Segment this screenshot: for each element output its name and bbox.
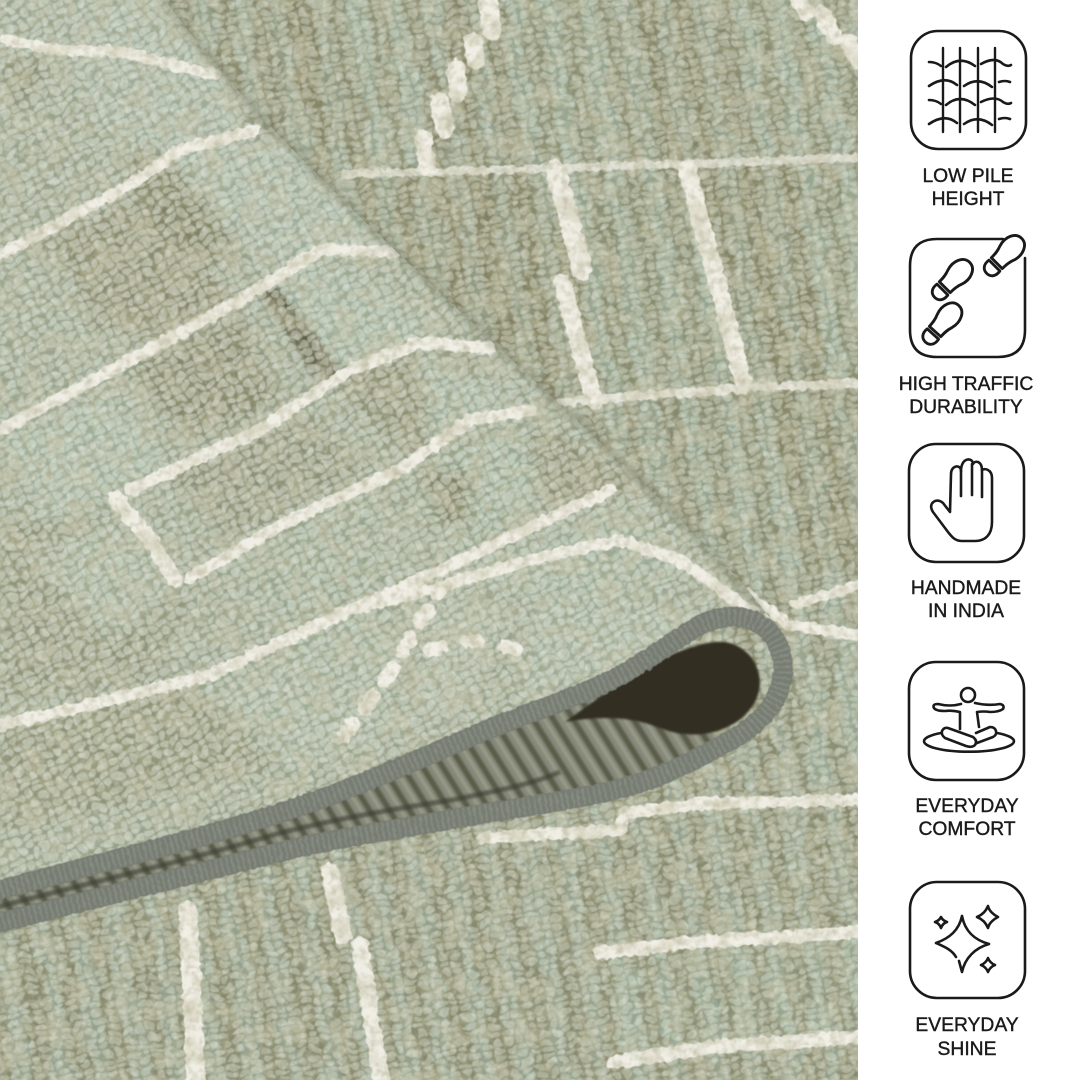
label: everyday comfort: COMFORT — [918, 819, 1016, 840]
label: everyday shine: SHINE — [938, 1039, 997, 1060]
fold shadow — [165, 0, 772, 628]
icon panel: everyday comfort — [909, 662, 1024, 840]
label: high traffic durability — [899, 374, 1033, 418]
icon panel: handmade in india — [909, 444, 1024, 622]
icon: woven pile — [911, 31, 1026, 149]
label: everyday shine — [915, 1015, 1019, 1060]
label: everyday shine: EVERYDAY — [915, 1015, 1019, 1036]
label: high traffic durability: HIGH TRAFFIC — [899, 374, 1033, 395]
label: everyday comfort: EVERYDAY — [915, 796, 1019, 817]
hem: continuous binding — [0, 617, 783, 925]
label: handmade in india: HANDMADE — [911, 578, 1021, 599]
underside ribs — [0, 691, 719, 912]
white rug lines fold — [0, 40, 770, 735]
inner dark opening — [565, 642, 760, 734]
label: high traffic durability: DURABILITY — [909, 397, 1023, 418]
label: low pile height: LOW PILE — [922, 166, 1014, 187]
icon: footprints — [910, 231, 1029, 357]
hem shadow — [0, 772, 560, 909]
rug folded layer — [0, 0, 800, 900]
rug underside and hem — [0, 617, 783, 925]
dark accent — [256, 288, 342, 380]
icon: hand — [909, 444, 1024, 562]
icon panel: high traffic durability — [899, 231, 1033, 418]
icon panel: low pile height — [911, 31, 1026, 210]
knit rows fold — [0, 0, 800, 900]
icon: sparkles — [910, 882, 1025, 998]
icon: meditating figure — [909, 662, 1024, 780]
knit rows flat — [0, 0, 858, 1080]
label: low pile height: HEIGHT — [932, 189, 1005, 210]
label: low pile height — [922, 166, 1014, 210]
texture: knit pile — [0, 0, 858, 1080]
label: handmade in india — [911, 578, 1021, 622]
icon panel: everyday shine — [910, 882, 1025, 1060]
white rug lines flat — [188, 0, 858, 1080]
label: handmade in india: IN INDIA — [928, 601, 1004, 622]
label: everyday comfort — [915, 796, 1019, 840]
